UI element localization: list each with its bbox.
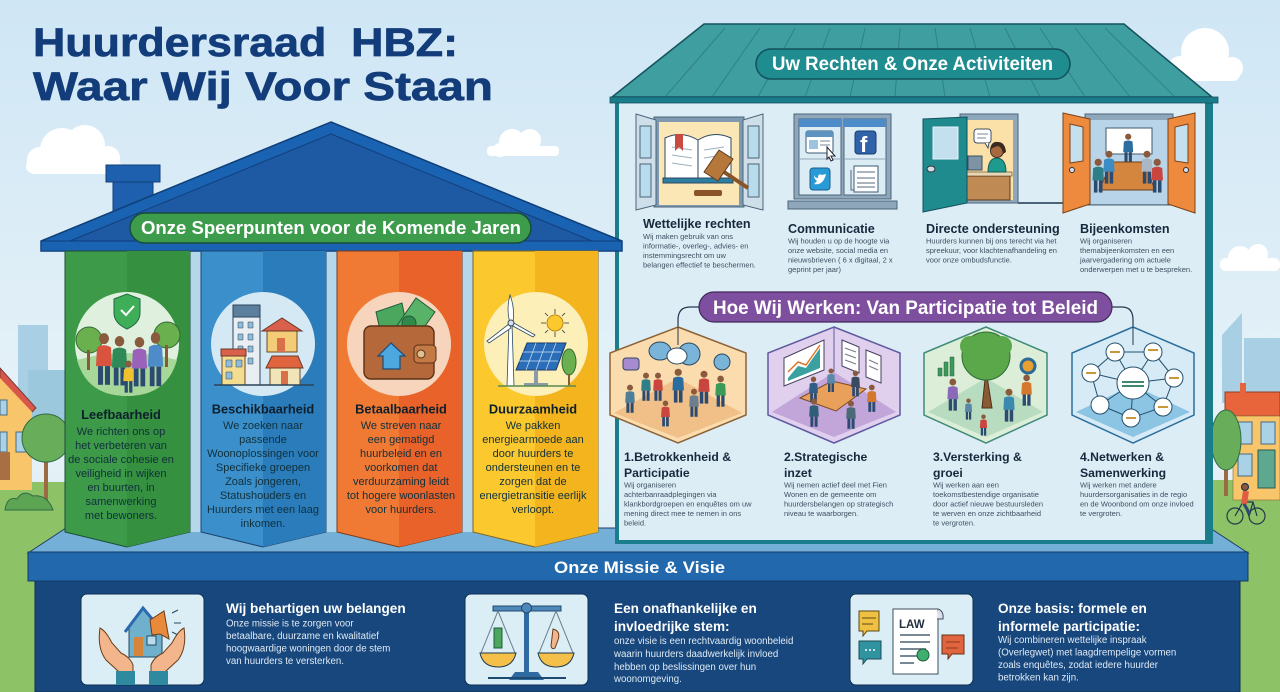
- text: network: [1080, 450, 1194, 518]
- text: sustainability: Duurzaamheid: [489, 402, 577, 416]
- base slab: [28, 528, 1248, 553]
- text: liveability: We richten ons op: [77, 426, 165, 438]
- title: Waar Wij Voor Staan: [33, 65, 493, 109]
- pillar: liveability: [65, 251, 190, 547]
- text: vision: onze visie is een rechtvaardig woonbeleid: [614, 636, 793, 647]
- text: availability: Specifieke groepen: [216, 462, 310, 474]
- hexagon icon: growth: [924, 327, 1047, 443]
- cloud: right: [1220, 244, 1280, 271]
- text: availability: [207, 402, 319, 530]
- text: participation: [624, 450, 752, 528]
- mission header band: Onze Missie & Visie: [554, 558, 725, 577]
- text: meetings: Wij organiseren: [1080, 236, 1132, 246]
- text: communication: [788, 222, 893, 274]
- text: vision: hebben op beslissingen over hun: [614, 662, 756, 673]
- text: availability: Statushouders en: [220, 490, 306, 502]
- text: mission: [226, 601, 406, 667]
- text: meetings: themabijeenkomsten en een: [1080, 246, 1174, 255]
- text: strategy: inzet: [784, 466, 812, 480]
- text: vision: Een onafhankelijke en: [614, 601, 757, 616]
- text: growth: te werven en onze zichtbaarheid: [933, 509, 1041, 518]
- window icon: communication: [788, 114, 897, 209]
- text: communication: geprint per jaar): [788, 265, 841, 274]
- text: legal rights: Wettelijke rechten: [643, 217, 751, 231]
- text: affordability: We streven naar: [361, 420, 442, 432]
- title: Huurdersraad HBZ:: [33, 21, 458, 65]
- text: legal rights: informatie-, overleg-, advies- en: [643, 242, 748, 250]
- card icon: scales: [465, 594, 588, 685]
- text: availability: Woonoplossingen voor: [207, 448, 319, 460]
- text: participation: Participatie: [624, 466, 690, 480]
- window icon: legal rights: [636, 114, 763, 210]
- text: availability: Huurders met een laag: [207, 504, 319, 516]
- chimney: [106, 165, 160, 220]
- text: sustainability: zorgen dat de: [499, 476, 567, 488]
- banner: how we work: [699, 292, 1112, 322]
- text: network: 4.Netwerken &: [1080, 450, 1164, 464]
- text: liveability: en buurten, in: [87, 482, 155, 494]
- scene: left house: [0, 368, 36, 490]
- text: growth: 3.Versterking &: [933, 450, 1022, 464]
- cloud: upper right: [1165, 28, 1243, 81]
- text: participation: achterbanraadplegingen via: [624, 490, 717, 499]
- hexagon icon: network: [1072, 327, 1194, 443]
- text: communication: Wij houden u op de hoogte via: [788, 236, 890, 246]
- text: basis: Wij combineren wettelijke inspraak: [998, 635, 1147, 646]
- banner: rights and activities: Uw Rechten & Onze Activiteiten: [772, 54, 1053, 75]
- text: strategy: niveau te waarborgen.: [784, 509, 858, 518]
- text: direct support: [926, 222, 1060, 264]
- text: mission: Onze missie is te zorgen voor: [226, 618, 354, 630]
- text: direct support: voor onze ombudsfunctie.: [926, 256, 1012, 264]
- text: liveability: [68, 407, 174, 522]
- icon: green energy: [484, 292, 588, 396]
- scene: right tree: [1211, 410, 1241, 496]
- text: vision: waarin huurders daadwerkelijk invloed: [613, 649, 778, 660]
- text: sustainability: verloopt.: [512, 504, 554, 516]
- house: right: [610, 24, 1218, 542]
- house: left: [41, 122, 622, 547]
- scene: left bush: [5, 493, 53, 510]
- mission header band: [28, 552, 1248, 581]
- text: vision: [613, 601, 793, 685]
- text: affordability: voor huurders.: [366, 504, 436, 516]
- text: direct support: spreekuur, voor klachtenafhandeling en: [926, 246, 1057, 255]
- banner: how we work: Hoe Wij Werken: Van Participatie tot Beleid: [713, 298, 1098, 319]
- text: network: te vergroten.: [1080, 509, 1122, 518]
- text: affordability: huurbeleid en en: [360, 448, 442, 460]
- text: sustainability: energiearmoede aan: [482, 434, 584, 446]
- text: strategy: huurdersbelangen op strategisch: [784, 500, 893, 508]
- text: strategy: Wij nemen actief deel met Fien: [784, 480, 887, 490]
- cloud: centre: [487, 129, 559, 157]
- pillar: affordability: [337, 251, 462, 547]
- pillar: sustainability: [473, 251, 598, 547]
- text: network: en de Woonbond om onze invloed: [1080, 500, 1194, 508]
- text: affordability: [347, 402, 455, 516]
- text: sustainability: energietransitie eerlijk: [480, 490, 587, 502]
- card icon: law document: LAW: [899, 619, 925, 631]
- text: growth: door actief nieuwe bestuursleden: [933, 500, 1043, 508]
- text: network: Wij werken met andere: [1080, 480, 1157, 490]
- mission panel background: [35, 578, 1240, 692]
- text: growth: groei: [933, 466, 963, 480]
- banner: rights and activities: [756, 49, 1070, 79]
- text: sustainability: ondersteunen en te: [486, 462, 580, 474]
- text: communication: nieuwsbrieven ( 6 x digitaal, 2 x: [788, 256, 893, 264]
- text: basis: informele participatie:: [998, 619, 1140, 634]
- text: availability: We zoeken naar: [223, 420, 303, 432]
- text: liveability: de sociale cohesie en: [68, 454, 174, 466]
- pillar: availability: [201, 251, 326, 547]
- hexagon icon: strategy: [768, 327, 900, 443]
- text: vision: invloedrijke stem:: [614, 619, 730, 634]
- scene: cyclist: [1227, 484, 1265, 524]
- banner: spearheads: [130, 213, 531, 243]
- text: growth: [933, 450, 1043, 528]
- text: basis: (Overlegwet) met laagdrempelige vormen: [998, 648, 1176, 658]
- icon: housing: [211, 292, 315, 396]
- text: meetings: onderwerpen met u te bespreken.: [1080, 265, 1192, 274]
- text: strategy: [784, 450, 893, 518]
- text: affordability: voorkomen dat: [365, 462, 437, 474]
- title: [33, 21, 493, 109]
- text: communication: Communicatie: [788, 222, 875, 236]
- text: mission: Wij behartigen uw belangen: [226, 601, 406, 616]
- text: strategy: 2.Strategische: [784, 450, 868, 464]
- text: sustainability: We pakken: [506, 420, 560, 432]
- banner: spearheads: Onze Speerpunten voor de Komende Jaren: [141, 218, 521, 238]
- text: meetings: [1079, 222, 1192, 274]
- right house wall: [617, 100, 1211, 542]
- text: direct support: Directe ondersteuning: [926, 222, 1060, 236]
- text: legal rights: [643, 217, 756, 270]
- text: basis: betrokken kan zijn.: [998, 672, 1079, 684]
- text: growth: te vergroten.: [933, 518, 975, 528]
- left house roof: [41, 122, 622, 251]
- text: liveability: veiligheid in wijken: [75, 468, 167, 480]
- left house interior: [190, 250, 598, 532]
- text: network: Samenwerking: [1080, 466, 1166, 480]
- text: vision: woonomgeving.: [613, 674, 682, 685]
- scene: right house: [1225, 383, 1280, 500]
- text: participation: mening direct mee te nemen in ons: [624, 509, 741, 518]
- text: availability: Beschikbaarheid: [212, 402, 314, 416]
- text: liveability: met bewoners.: [85, 510, 157, 522]
- text: basis: Onze basis: formele en: [998, 601, 1147, 616]
- text: availability: inkomen.: [241, 518, 285, 530]
- hexagon icon: participation: [610, 327, 746, 443]
- icon: community: [75, 292, 180, 396]
- icon: wallet: [347, 292, 451, 396]
- text: sustainability: [480, 402, 587, 516]
- text: legal rights: Wij maken gebruik van ons: [643, 232, 733, 241]
- grass: [0, 480, 1280, 692]
- window icon: communication: f: [860, 132, 868, 157]
- text: legal rights: belangen effectief te beschermen.: [643, 260, 756, 270]
- text: liveability: Leefbaarheid: [81, 407, 161, 422]
- text: availability: passende: [239, 434, 287, 446]
- text: participation: beleid.: [624, 518, 646, 528]
- text: meetings: jaarvergadering om actuele: [1079, 256, 1171, 264]
- door icon: meetings: [1063, 113, 1195, 213]
- text: basis: zoals enquêtes, zodat iedere huurder: [998, 660, 1159, 671]
- card icon: hands and house: [81, 594, 204, 685]
- text: participation: 1.Betrokkenheid &: [624, 450, 731, 464]
- text: participation: Wij organiseren: [624, 480, 676, 490]
- text: communication: onze website, social media en: [788, 246, 888, 255]
- cloud: upper left: [26, 125, 121, 174]
- connector lines: [678, 307, 1133, 345]
- text: affordability: tot hogere woonlasten: [347, 490, 455, 502]
- background city: right: [1222, 313, 1280, 408]
- text: mission: betaalbare, duurzame en kwalitatief: [226, 631, 379, 642]
- text: liveability: het verbeteren van: [75, 440, 167, 452]
- text: availability: Zoals jongeren,: [225, 476, 301, 488]
- text: growth: toekomstbestendige organisatie: [933, 490, 1039, 499]
- text: growth: Wij werken aan een: [933, 480, 999, 490]
- text: direct support: Huurders kunnen bij ons terecht via het: [926, 236, 1057, 246]
- text: liveability: samenwerking: [86, 496, 156, 508]
- text: affordability: een gematigd: [368, 434, 434, 446]
- card icon: law document: [850, 594, 973, 685]
- right house roof: [610, 24, 1218, 103]
- text: legal rights: instemmingsrecht om uw: [643, 251, 727, 260]
- text: affordability: verduurzaming leidt: [353, 476, 449, 488]
- text: sustainability: door huurders te: [493, 448, 573, 460]
- text: basis: [998, 601, 1176, 684]
- text: network: huurdersorganisaties in de regio: [1080, 490, 1187, 499]
- panel: mission and vision: [28, 552, 1248, 692]
- door icon: direct support: [923, 114, 1063, 212]
- background city: left: [18, 325, 68, 440]
- text: meetings: Bijeenkomsten: [1080, 222, 1170, 236]
- text: affordability: Betaalbaarheid: [355, 402, 447, 416]
- text: mission: hoogwaardige woningen door de stem: [226, 644, 390, 654]
- text: mission: van huurders te versterken.: [226, 656, 344, 667]
- text: strategy: Wonen en de gemeente om: [784, 490, 876, 499]
- text: participation: klankbordgroepen en enquêtes om uw: [624, 500, 752, 508]
- scene: left tree: [22, 414, 70, 502]
